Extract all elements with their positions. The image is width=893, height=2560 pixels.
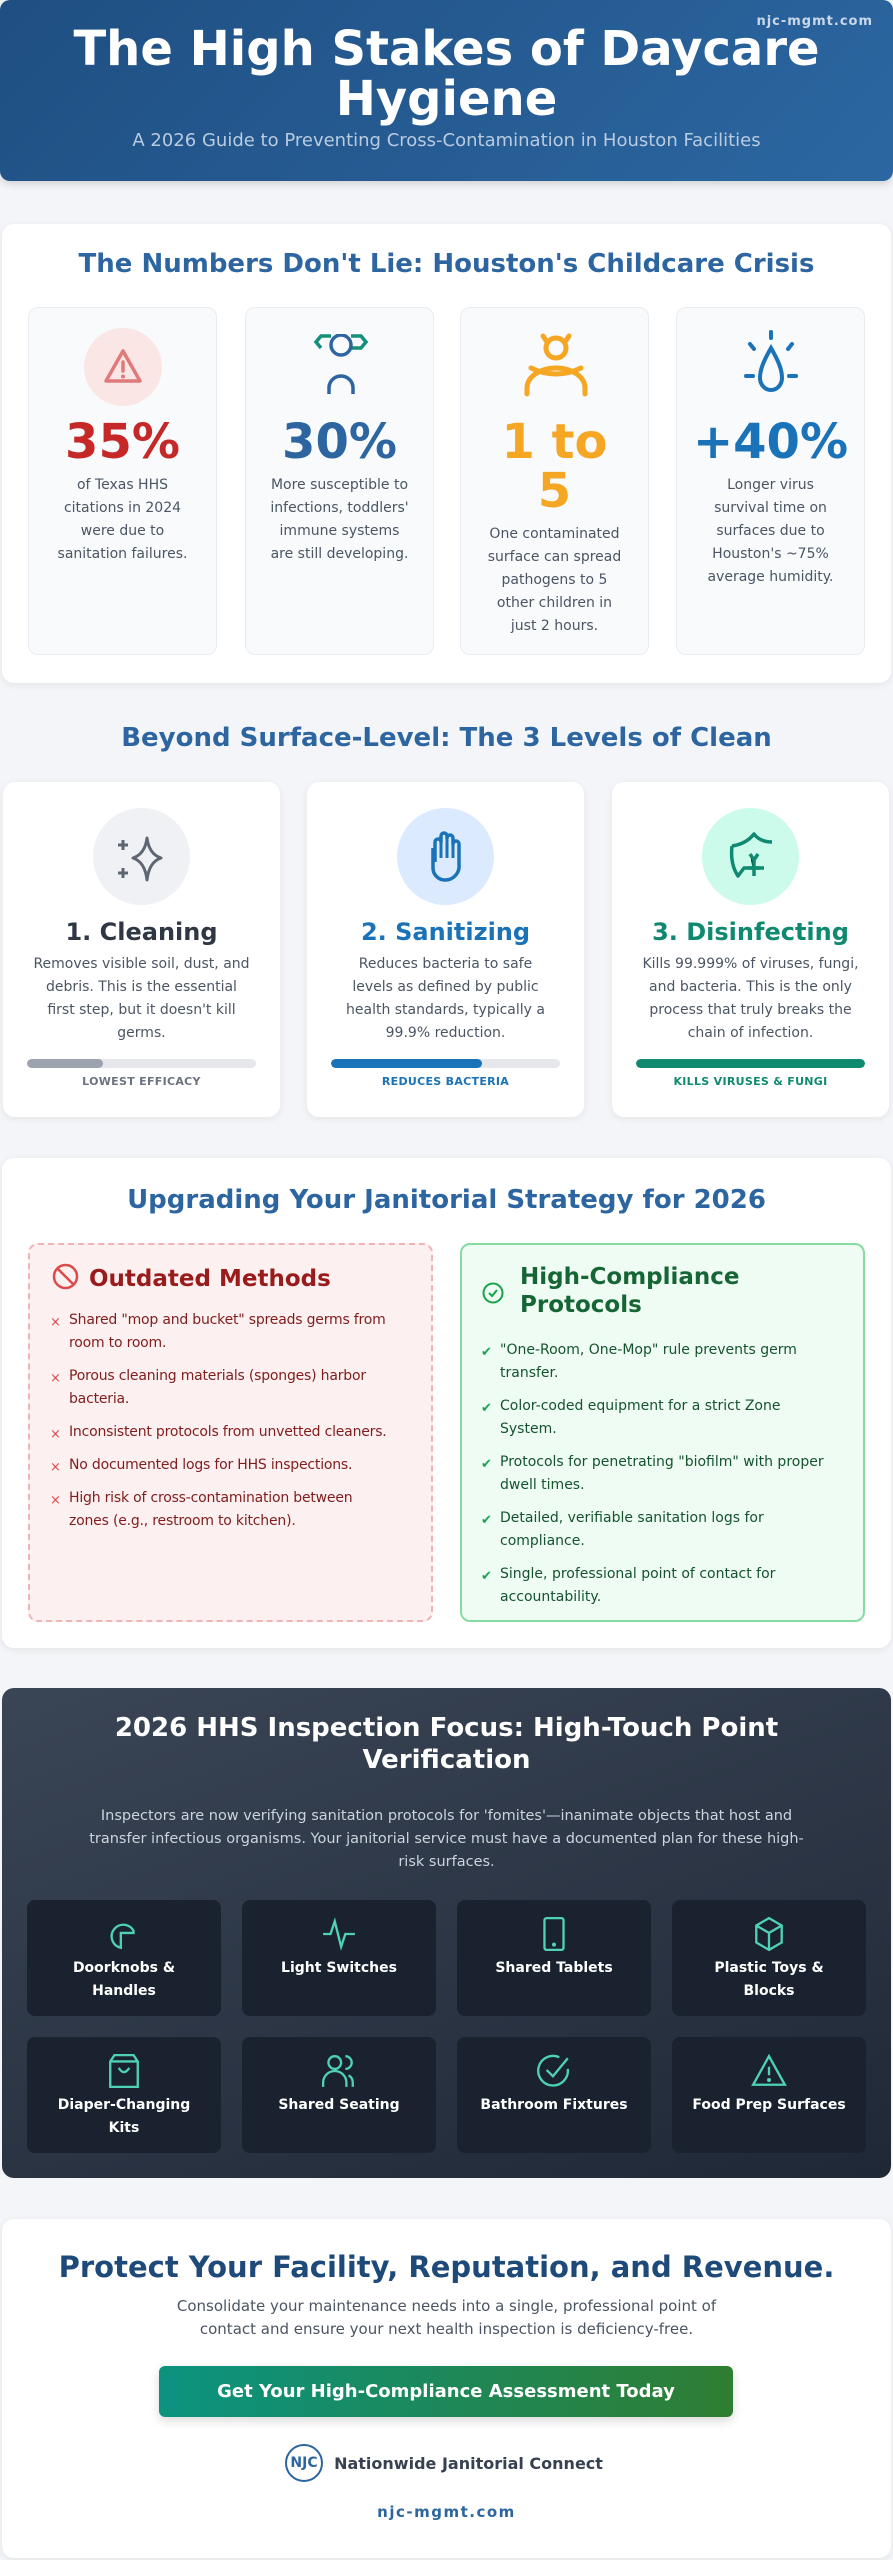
tile: light switches: Light Switches (281, 1960, 397, 1976)
level description: health standards, typically a (346, 1002, 545, 1018)
header banner (0, 0, 893, 181)
heading: levels of clean: Beyond Surface-Level: The 3 Levels of Clean (121, 723, 772, 753)
logo: Nationwide Janitorial Connect (334, 2454, 603, 2472)
tile: toys: Blocks (743, 1983, 795, 1999)
panel: HHS inspection focus (2, 1688, 891, 2178)
main title: The High Stakes of Daycare (73, 21, 820, 77)
icon: hand (397, 808, 494, 905)
panel: high-compliance: ✔ (481, 1457, 492, 1472)
level card: cleaning (3, 782, 280, 1117)
level description: Kills 99.999% of viruses, fungi, (642, 956, 859, 972)
panel: call to action (2, 2219, 891, 2558)
panel: high-compliance (460, 1243, 865, 1622)
level description: chain of infection. (688, 1025, 813, 1041)
level description: Reduces bacteria to safe (359, 956, 532, 972)
outdated list: No documented logs for HHS inspections. (69, 1457, 352, 1473)
stat text: More susceptible to infections, toddlers' immune systems are still developing. (270, 477, 409, 562)
level description (346, 956, 545, 1041)
bar label: REDUCES BACTERIA (382, 1075, 509, 1088)
stat text: One contaminated surface can spread pathogens to 5 other children in just 2 hours. (488, 526, 621, 634)
stat number: +40% (693, 414, 848, 470)
compliance heading: Protocols (520, 1292, 642, 1318)
level description (642, 956, 859, 1041)
level description: first step, but it doesn't kill (47, 1002, 236, 1018)
panel: high-compliance: ✔ (481, 1569, 492, 1584)
tile: doorknobs: Handles (92, 1983, 156, 1999)
tile: diaper kits (27, 2037, 221, 2153)
icon: droplet (744, 330, 798, 392)
HHS paragraph: Inspectors are now verifying sanitation protocols for 'fomites'—inanimate objects that host and transfer infectious organisms. Your janitorial service must have a documented plan for these high-risk surfaces. (89, 1808, 804, 1870)
tile: tablets: Shared Tablets (495, 1960, 613, 1976)
tile: seating (242, 2037, 436, 2153)
header url: njc-mgmt.com (756, 14, 873, 29)
compliance list: Protocols for penetrating "biofilm" with proper (500, 1454, 824, 1470)
tile: bathroom: Bathroom Fixtures (480, 2097, 628, 2113)
tile: toys (672, 1900, 866, 2016)
tile: tablets (457, 1900, 651, 2016)
outdated list: zones (e.g., restroom to kitchen). (69, 1513, 296, 1529)
stat number: 30% (282, 414, 397, 470)
CTA button: Get Your High-Compliance Assessment Today (217, 2381, 675, 2402)
outdated list (50, 1312, 387, 1529)
level title: 1. Cleaning (65, 918, 218, 946)
stat card 2 (245, 307, 434, 655)
footer url: njc-mgmt.com (377, 2503, 516, 2521)
panel: numbers (2, 224, 891, 683)
compliance list: System. (500, 1421, 557, 1437)
panel: outdated methods: × (50, 1315, 61, 1330)
stat card 4 (676, 307, 865, 655)
main title (73, 21, 820, 127)
stat number: 5 (538, 463, 571, 519)
efficacy bar (27, 1059, 256, 1068)
panel: outdated methods (28, 1243, 433, 1622)
outdated list: High risk of cross-contamination between (69, 1490, 352, 1506)
level description: process that truly breaks the (649, 1002, 852, 1018)
heading: HHS: 2026 HHS Inspection Focus: High-Touch Point (115, 1713, 778, 1743)
tile: diaper kits: Diaper-Changing (58, 2097, 190, 2113)
panel: outdated methods: × (50, 1371, 61, 1386)
outdated heading: Outdated Methods (89, 1266, 331, 1292)
compliance heading (482, 1264, 740, 1318)
CTA button (159, 2366, 733, 2417)
level description: debris. This is the essential (46, 979, 237, 995)
CTA paragraph: Consolidate your maintenance needs into a single, professional point of contact and ensure your next health inspection is deficiency-free. (177, 2297, 716, 2338)
tile: doorknobs (27, 1900, 221, 2016)
tile: doorknobs: Doorknobs & (73, 1960, 175, 1976)
heading: strategy: Upgrading Your Janitorial Strategy for 2026 (127, 1185, 766, 1215)
panel: strategy comparison (2, 1158, 891, 1648)
CTA heading: Protect Your Facility, Reputation, and Revenue. (59, 2250, 834, 2284)
heading: HHS (115, 1713, 778, 1775)
outdated list: room to room. (69, 1335, 166, 1351)
icon: shield (702, 808, 799, 905)
panel: outdated methods: × (50, 1427, 61, 1442)
level title: 2. Sanitizing (361, 918, 530, 946)
compliance list (481, 1342, 824, 1605)
compliance heading: High-Compliance (520, 1264, 740, 1290)
efficacy bar (331, 1059, 560, 1068)
panel: high-compliance: ✔ (481, 1513, 492, 1528)
icon: warning (84, 328, 162, 406)
compliance list: transfer. (500, 1365, 558, 1381)
level card: sanitizing (307, 782, 584, 1117)
level title: 3. Disinfecting (652, 918, 849, 946)
outdated list: bacteria. (69, 1391, 129, 1407)
compliance list: Detailed, verifiable sanitation logs for (500, 1510, 764, 1526)
tile: seating: Shared Seating (278, 2097, 400, 2113)
level description: 99.9% reduction. (386, 1025, 505, 1041)
outdated list: Shared "mop and bucket" spreads germs from (69, 1312, 386, 1328)
icon: person (524, 334, 588, 396)
tile: bathroom (457, 2037, 651, 2153)
stat card 1 (28, 307, 217, 655)
level description: Removes visible soil, dust, and (33, 956, 250, 972)
panel: outdated methods: × (50, 1460, 61, 1475)
stat number (501, 414, 608, 519)
panel: high-compliance: ✔ (481, 1401, 492, 1416)
compliance list: dwell times. (500, 1477, 585, 1493)
bar label: LOWEST EFFICACY (82, 1075, 201, 1088)
panel: high-compliance: ✔ (481, 1345, 492, 1360)
stat card 3 (460, 307, 649, 655)
compliance list: Single, professional point of contact for (500, 1566, 775, 1582)
level description: levels as defined by public (352, 979, 539, 995)
efficacy bar (636, 1059, 865, 1068)
level description: germs. (117, 1025, 166, 1041)
level description: and bacteria. This is the only (649, 979, 852, 995)
logo (285, 2444, 603, 2482)
logo: NJC (290, 2455, 318, 2471)
icon: child (314, 334, 368, 394)
stat text: of Texas HHS citations in 2024 were due to sanitation failures. (58, 477, 187, 562)
tile: food prep: Food Prep Surfaces (692, 2097, 846, 2113)
compliance list: "One-Room, One-Mop" rule prevents germ (500, 1342, 797, 1358)
subtitle: A 2026 Guide to Preventing Cross-Contamination in Houston Facilities (132, 130, 761, 151)
compliance list: Color-coded equipment for a strict Zone (500, 1398, 780, 1414)
heading: numbers: The Numbers Don't Lie: Houston's Childcare Crisis (79, 249, 814, 279)
stat number: 1 to (501, 414, 608, 470)
level description (33, 956, 250, 1041)
heading: HHS: Verification (362, 1745, 530, 1775)
tile: light switches (242, 1900, 436, 2016)
compliance list: compliance. (500, 1533, 585, 1549)
tile: food prep (672, 2037, 866, 2153)
compliance list: accountability. (500, 1589, 601, 1605)
level card: disinfecting (612, 782, 889, 1117)
bar label: KILLS VIRUSES & FUNGI (673, 1075, 828, 1088)
stat number: 35% (65, 414, 180, 470)
tile: toys: Plastic Toys & (714, 1960, 824, 1976)
stat text: Longer virus survival time on surfaces due to Houston's ~75% average humidity. (707, 477, 834, 585)
outdated list: Porous cleaning materials (sponges) harbor (69, 1368, 366, 1384)
panel: outdated methods: × (50, 1493, 61, 1508)
icon: sparkle (93, 808, 190, 905)
outdated list: Inconsistent protocols from unvetted cleaners. (69, 1424, 387, 1440)
main title: Hygiene (336, 71, 557, 127)
tile: diaper kits: Kits (109, 2120, 139, 2136)
